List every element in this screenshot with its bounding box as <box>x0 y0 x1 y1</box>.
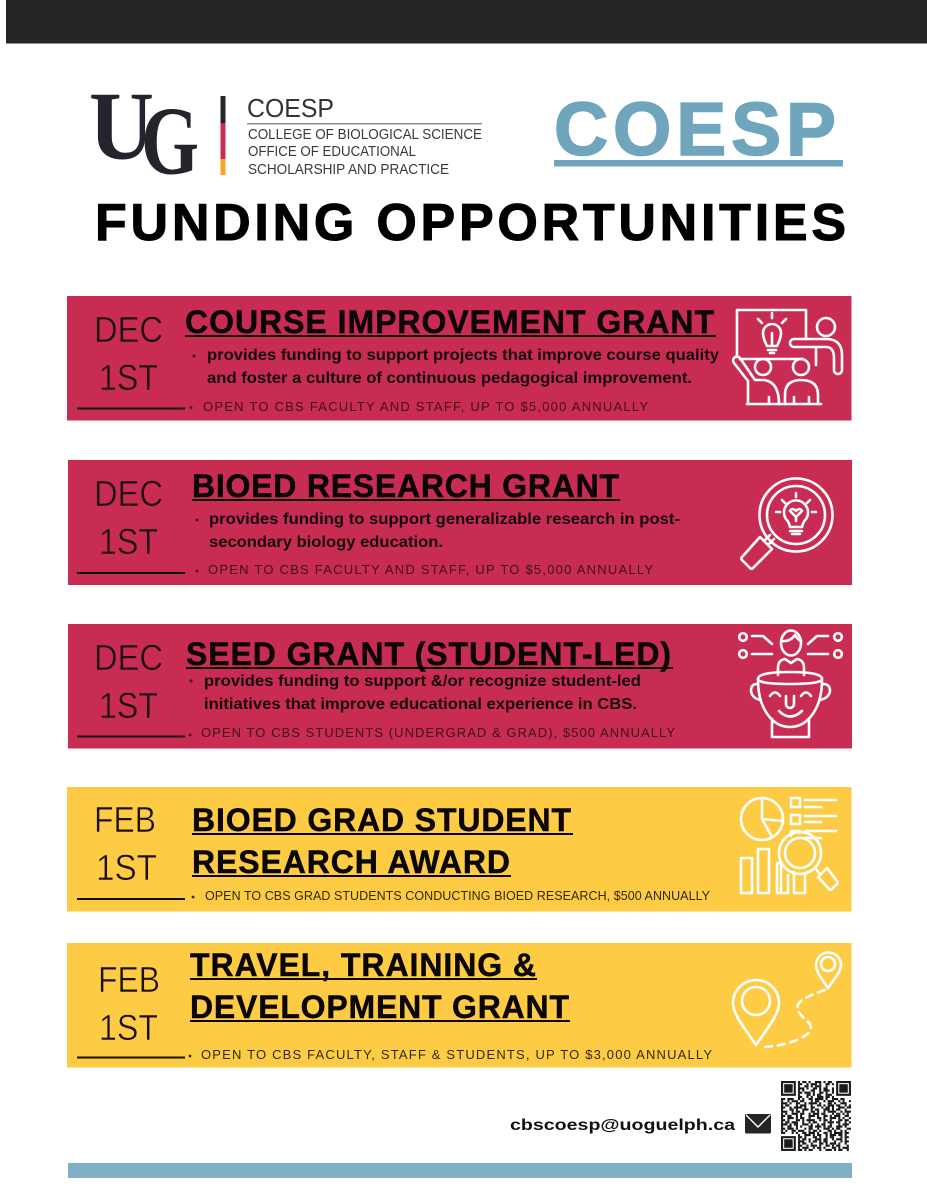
title: FUNDING OPPORTUNITIES <box>95 194 846 252</box>
icon: map route with pins <box>733 952 841 1047</box>
date: Dec 1st: DEC <box>94 309 163 350</box>
date: Feb 1st: 1ST <box>99 1007 158 1048</box>
panel: bioed research grant <box>68 460 852 585</box>
date: Dec 1st <box>77 473 185 574</box>
heading: COURSE IMPROVEMENT GRANT <box>185 304 714 340</box>
date: Dec 1st <box>77 309 185 410</box>
panel: travel training and development grant <box>67 943 852 1068</box>
icon: presenter with lightbulb <box>733 310 842 404</box>
UG COESP logo: COESP <box>247 93 334 123</box>
panel: seed grant <box>68 624 852 748</box>
date: Dec 1st: 1ST <box>99 685 158 726</box>
icon: magnifier with lightbulb <box>741 478 832 569</box>
panel: course improvement grant <box>67 296 852 420</box>
UG COESP logo: G <box>141 88 199 194</box>
COESP wordmark: COESP <box>554 87 836 171</box>
date: Feb 1st: FEB <box>98 959 160 1000</box>
date: Feb 1st: 1ST <box>96 847 157 888</box>
eligibility: OPEN TO CBS STUDENTS (UNDERGRAD & GRAD), $500 ANNUALLY <box>201 725 675 740</box>
eligibility: OPEN TO CBS FACULTY, STAFF & STUDENTS, UP TO $3,000 ANNUALLY <box>201 1047 712 1062</box>
heading: TRAVEL, TRAINING & <box>190 947 536 983</box>
icon: envelope <box>745 1114 771 1134</box>
description: provides funding to support &/or recognize student-led <box>204 673 641 690</box>
eligibility: OPEN TO CBS FACULTY AND STAFF, UP TO $5,000 ANNUALLY <box>208 562 653 577</box>
date: Feb 1st <box>77 959 185 1058</box>
date: Dec 1st <box>77 637 185 738</box>
eligibility: OPEN TO CBS GRAD STUDENTS CONDUCTING BIOED RESEARCH, $500 ANNUALLY <box>205 889 711 903</box>
bottom blue bar <box>68 1163 852 1178</box>
UG COESP logo: U <box>89 72 154 180</box>
date: Dec 1st: DEC <box>94 637 163 678</box>
UG COESP logo: SCHOLARSHIP AND PRACTICE <box>248 161 449 178</box>
description <box>192 347 719 387</box>
description <box>190 673 641 713</box>
contact email: cbscoesp@uoguelph.ca <box>510 1117 735 1134</box>
date: Feb 1st <box>77 799 185 900</box>
UG COESP logo: COLLEGE OF BIOLOGICAL SCIENCE <box>248 126 482 143</box>
QR code <box>781 1082 851 1150</box>
description: initiatives that improve educational experience in CBS. <box>204 696 637 713</box>
description: and foster a culture of continuous pedagogical improvement. <box>207 370 692 387</box>
top dark bar <box>6 0 927 44</box>
heading <box>190 947 570 1025</box>
date: Dec 1st: DEC <box>94 473 163 514</box>
description <box>196 511 680 551</box>
date: Dec 1st: 1ST <box>99 357 158 398</box>
description: provides funding to support generalizable research in post- <box>209 511 680 528</box>
heading: SEED GRANT (STUDENT-LED) <box>186 636 671 672</box>
icon: head with person and nodes <box>739 630 842 737</box>
eligibility: OPEN TO CBS FACULTY AND STAFF, UP TO $5,000 ANNUALLY <box>203 399 648 414</box>
heading: BIOED GRAD STUDENT <box>192 802 571 838</box>
heading: DEVELOPMENT GRANT <box>190 989 569 1025</box>
icon: charts and magnifier <box>741 798 838 893</box>
date: Feb 1st: FEB <box>94 799 156 840</box>
heading: BIOED RESEARCH GRANT <box>192 468 619 504</box>
UG COESP logo: OFFICE OF EDUCATIONAL <box>248 143 416 160</box>
panel: bioed grad student research award <box>67 787 852 912</box>
heading <box>192 802 573 880</box>
heading: RESEARCH AWARD <box>192 844 510 880</box>
description: secondary biology education. <box>209 534 443 551</box>
date: Dec 1st: 1ST <box>99 521 158 562</box>
UG COESP logo <box>89 72 482 194</box>
description: provides funding to support projects that improve course quality <box>207 347 719 364</box>
